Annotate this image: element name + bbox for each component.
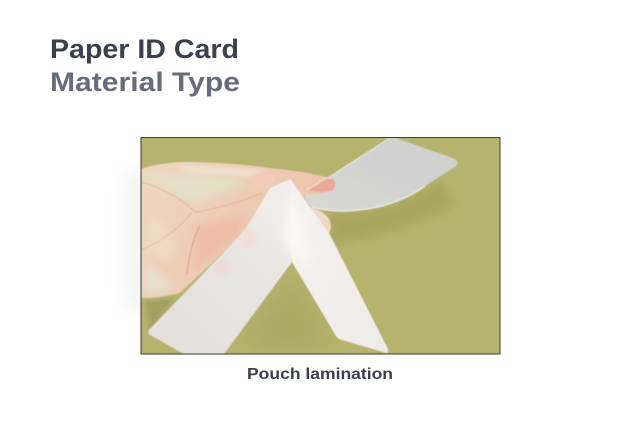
- soft shadow behind photo: [128, 170, 152, 310]
- photo panel: hand holding laminating pouch: [141, 137, 500, 354]
- title: [50, 34, 240, 97]
- thumb nail: [268, 185, 270, 188]
- background shading: [330, 184, 451, 243]
- photo border: [141, 138, 500, 354]
- hand: [141, 162, 335, 298]
- fingertips seen through card: [241, 229, 256, 248]
- thumb crease and contours: [141, 182, 262, 212]
- caption: Pouch lamination: [247, 366, 393, 383]
- title line 2: Material Type: [50, 67, 240, 97]
- hand highlights: [156, 176, 242, 202]
- front card: right strip: [290, 179, 388, 353]
- title line 1: Paper ID Card: [50, 34, 239, 64]
- palm pink zone: [195, 218, 241, 263]
- olive background: [141, 137, 500, 354]
- finger nail over back card: [309, 179, 335, 192]
- front card: bright fold: [286, 210, 292, 251]
- lower finger behind card: [309, 206, 332, 234]
- infographic canvas: [52, 38, 500, 379]
- back card: [305, 138, 458, 211]
- front card: left strip: [148, 178, 292, 354]
